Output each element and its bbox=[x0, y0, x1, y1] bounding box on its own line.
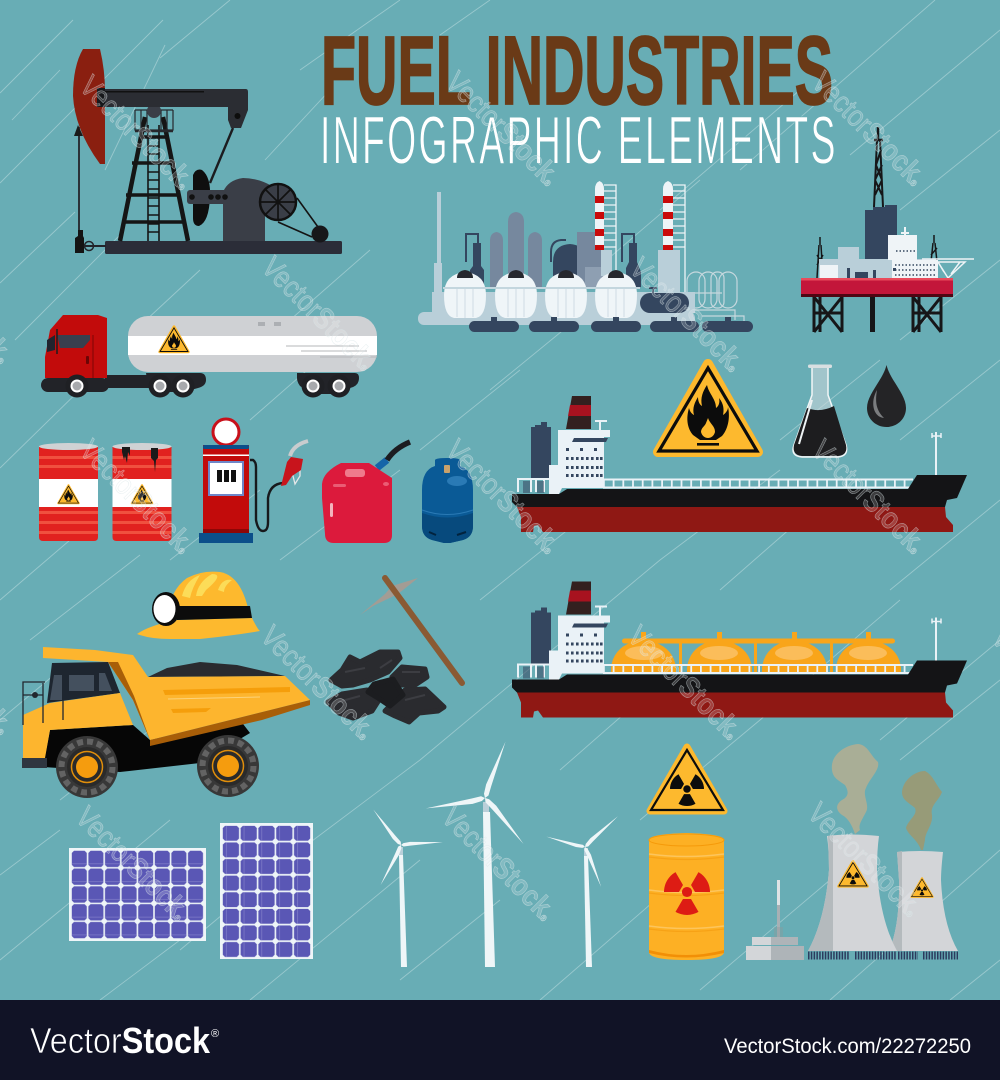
ship: LNG gas carrier bbox=[512, 582, 967, 718]
icon: oil drop bbox=[867, 365, 906, 427]
watermarks: VectorStock® bbox=[435, 801, 562, 927]
footer logo: VectorStock bbox=[30, 1020, 211, 1061]
watermarks: VectorStock® bbox=[439, 66, 566, 192]
icon: gas cylinder bbox=[422, 458, 473, 543]
icon: nuclear cooling tower right bbox=[889, 771, 958, 956]
footer registered mark: ® bbox=[211, 1028, 219, 1040]
icon: reactor stack building bbox=[746, 880, 804, 960]
watermarks: VectorStock® bbox=[255, 251, 382, 377]
watermarks: VectorStock® bbox=[73, 70, 200, 196]
watermarks: VectorStock® bbox=[801, 797, 928, 923]
watermarks: VectorStock® bbox=[73, 434, 200, 560]
watermarks bbox=[0, 66, 1000, 927]
icon: jerry can bbox=[322, 442, 410, 543]
icon: tanker truck bbox=[41, 315, 377, 398]
icon: wind turbine left bbox=[371, 808, 443, 967]
watermarks: VectorStock® bbox=[439, 434, 566, 560]
icon: fuel pump bbox=[199, 419, 308, 543]
icon: solar panel portrait bbox=[220, 823, 313, 959]
icon: nuclear cooling tower left bbox=[808, 744, 897, 956]
subtitle: infographic elements: INFOGRAPHIC ELEMENTS bbox=[320, 102, 838, 178]
icon: coal pile bbox=[328, 652, 444, 722]
icon: wind turbine right bbox=[546, 814, 619, 967]
watermarks: VectorStock® bbox=[623, 252, 750, 378]
icon: oil barrel with leaks bbox=[112, 443, 172, 541]
watermarks: VectorStock® bbox=[69, 801, 196, 927]
icon: oil refinery bbox=[418, 181, 753, 332]
icon: radiation warning sign bbox=[650, 747, 724, 811]
watermarks: VectorStock® bbox=[805, 66, 932, 192]
icon: miner helmet with lamp bbox=[137, 572, 260, 639]
icon: oil pumpjack bbox=[73, 49, 342, 254]
icon: solar panel landscape bbox=[69, 848, 206, 941]
icon: mining dump truck bbox=[22, 647, 310, 798]
icon: pickaxe bbox=[360, 578, 462, 683]
icon: oil flask bbox=[793, 364, 847, 457]
watermarks: VectorStock® bbox=[805, 434, 932, 560]
watermarks: VectorStock® bbox=[254, 620, 381, 746]
ship: oil tanker bbox=[512, 396, 967, 532]
footer image id: VectorStock.com/22272250 bbox=[724, 1035, 971, 1058]
icon: flammable warning sign bbox=[658, 364, 758, 452]
icon: radioactive barrel bbox=[649, 833, 724, 960]
footer bar bbox=[0, 1000, 1000, 1080]
watermarks: VectorStock® bbox=[621, 620, 748, 746]
icon: oil barrel clean bbox=[39, 443, 98, 541]
icon: wind turbine centre bbox=[425, 740, 526, 967]
icon: offshore oil rig bbox=[801, 127, 974, 332]
